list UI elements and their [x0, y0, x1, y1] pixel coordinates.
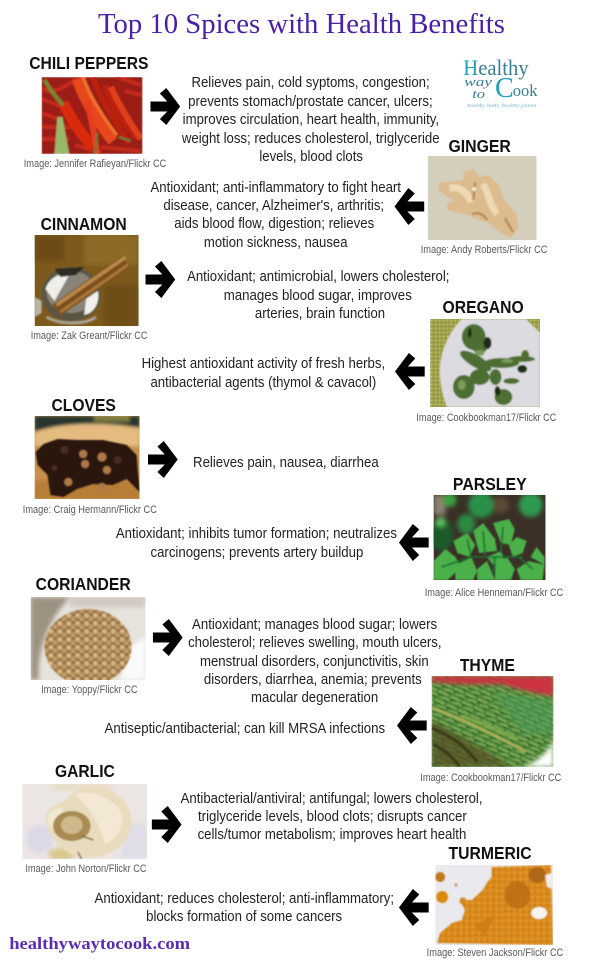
- arrow: left: [399, 524, 429, 561]
- caption: thyme: Image: Cookbookman17/Flickr CC: [420, 772, 561, 784]
- benefits text: coriander: cholesterol; relieves swelling, mouth ulcers,: [188, 634, 442, 651]
- panel: cinnamon: [31, 214, 449, 342]
- benefits text: ginger: Antioxidant; anti-inflammatory to fight heart: [150, 179, 402, 196]
- arrow: right: [148, 441, 178, 478]
- panel: garlic: [22, 761, 483, 875]
- arrow: left: [399, 889, 429, 926]
- panel: cloves: [23, 395, 379, 516]
- benefits text: turmeric: [95, 890, 394, 925]
- benefits text: cinnamon: Antioxidant; antimicrobial, lowers cholesterol;: [187, 268, 449, 285]
- benefits text: parsley: carcinogens; prevents artery buildup: [150, 544, 363, 561]
- caption: ginger: Image: Andy Roberts/Flickr CC: [421, 244, 548, 256]
- caption: garlic: Image: John Norton/Flickr CC: [25, 863, 147, 875]
- photo: thyme: [432, 676, 553, 767]
- benefits text: parsley: [116, 525, 397, 561]
- heading: turmeric: TURMERIC: [448, 843, 532, 863]
- heading: cloves: CLOVES: [51, 395, 116, 415]
- benefits text: ginger: [150, 179, 402, 251]
- heading: chili peppers: CHILI PEPPERS: [29, 53, 149, 73]
- benefits text: chili peppers: levels, blood clots: [259, 148, 363, 165]
- benefits text: oregano: [142, 355, 385, 391]
- benefits text: garlic: Antibacterial/antiviral; antifungal; lowers cholesterol,: [181, 790, 483, 807]
- benefits text: oregano: Highest antioxidant activity of fresh herbs,: [142, 355, 385, 372]
- photo: turmeric: [435, 865, 553, 945]
- benefits text: coriander: menstrual disorders, conjunctivitis, skin: [200, 653, 429, 670]
- panel: ginger: [150, 136, 548, 256]
- logo: Healthy way to Cook: healthy body, healthy planet: [467, 104, 537, 109]
- heading: garlic: GARLIC: [55, 761, 115, 781]
- caption: coriander: Image: Yoppy/Flickr CC: [41, 684, 138, 696]
- caption: cinnamon: Image: Zak Greant/Flickr CC: [31, 330, 148, 342]
- website url: healthywaytocook.com: [9, 934, 190, 953]
- panel: turmeric: [95, 843, 563, 959]
- benefits text: coriander: Antioxidant; manages blood sugar; lowers: [192, 616, 437, 633]
- benefits text: chili peppers: Relieves pain, cold syptoms, congestion;: [191, 74, 430, 91]
- logo: Healthy way to Cook: to: [472, 86, 486, 101]
- panel: coriander: [31, 574, 442, 706]
- benefits text: coriander: macular degeneration: [251, 689, 378, 706]
- benefits text: cloves: Relieves pain, nausea, diarrhea: [193, 454, 379, 471]
- heading: thyme: THYME: [460, 655, 515, 675]
- photo: chili peppers: [42, 77, 143, 154]
- arrow: left: [395, 188, 424, 225]
- logo: Healthy way to Cook: C: [495, 73, 514, 104]
- caption: parsley: Image: Alice Henneman/Flickr CC: [425, 587, 563, 599]
- photo: cinnamon: [35, 235, 139, 326]
- caption: cloves: Image: Craig Hermann/Flickr CC: [23, 504, 157, 516]
- logo: Healthy way to Cook: Healthy: [463, 55, 529, 80]
- caption: chili peppers: Image: Jennifer Rafieyan/Flickr CC: [24, 158, 166, 170]
- logo: Healthy way to Cook: way: [464, 74, 492, 89]
- arrow: right: [152, 806, 182, 843]
- benefits text: cinnamon: arteries, brain function: [255, 305, 385, 322]
- benefits text: coriander: [188, 616, 442, 706]
- benefits text: ginger: motion sickness, nausea: [204, 234, 348, 251]
- photo: coriander: [31, 597, 146, 685]
- arrow: left: [397, 707, 427, 744]
- benefits text: garlic: cells/tumor metabolism; improves heart health: [198, 826, 466, 843]
- benefits text: chili peppers: [181, 74, 440, 165]
- heading: parsley: PARSLEY: [453, 474, 527, 494]
- caption: turmeric: Image: Steven Jackson/Flickr CC: [427, 947, 563, 959]
- heading: cinnamon: CINNAMON: [41, 214, 127, 234]
- benefits text: cinnamon: manages blood sugar, improves: [224, 287, 412, 304]
- benefits text: chili peppers: improves circulation, heart health, immunity,: [183, 111, 439, 128]
- photo: ginger: [428, 156, 537, 240]
- panel: chili peppers: [24, 53, 440, 170]
- benefits text: oregano: antibacterial agents (thymol & cavacol): [150, 374, 376, 391]
- benefits text: turmeric: Antioxidant; reduces cholesterol; anti-inflammatory;: [95, 890, 394, 907]
- logo: Healthy way to Cook: [463, 55, 538, 109]
- logo: Healthy way to Cook: ook: [513, 81, 538, 100]
- arrow: left: [395, 353, 425, 390]
- benefits text: ginger: aids blood flow, digestion; relieves: [174, 215, 374, 232]
- benefits text: coriander: disorders, diarrhea, anemia; prevents: [204, 671, 422, 688]
- benefits text: parsley: Antioxidant; inhibits tumor formation; neutralizes: [116, 525, 397, 542]
- arrow: right: [150, 88, 180, 125]
- panel: parsley: [116, 474, 563, 599]
- photo: garlic: [22, 784, 147, 860]
- photo: cloves: [35, 416, 140, 499]
- benefits text: chili peppers: prevents stomach/prostate cancer, ulcers;: [188, 93, 433, 110]
- benefits text: garlic: [181, 790, 483, 843]
- heading: oregano: OREGANO: [443, 297, 524, 317]
- benefits text: turmeric: blocks formation of some cancers: [146, 908, 342, 925]
- benefits text: chili peppers: weight loss; reduces cholesterol, triglyceride: [181, 130, 440, 147]
- benefits text: thyme: Antiseptic/antibacterial; can kill MRSA infections: [105, 720, 385, 737]
- photo: parsley: [430, 492, 545, 580]
- photo: oregano: [430, 319, 540, 407]
- arrow: right: [146, 261, 175, 298]
- heading: coriander: CORIANDER: [36, 574, 131, 594]
- benefits text: garlic: triglyceride levels, blood clots; disrupts cancer: [198, 808, 467, 825]
- title: Top 10 Spices with Health Benefits: [98, 9, 505, 40]
- arrow: right: [153, 619, 183, 656]
- benefits text: ginger: disease, cancer, Alzheimer's, arthritis;: [163, 197, 384, 214]
- caption: oregano: Image: Cookbookman17/Flickr CC: [416, 412, 556, 424]
- heading: ginger: GINGER: [448, 136, 511, 156]
- panel: oregano: [142, 297, 556, 424]
- panel: thyme: [105, 655, 561, 784]
- benefits text: cinnamon: [187, 268, 449, 322]
